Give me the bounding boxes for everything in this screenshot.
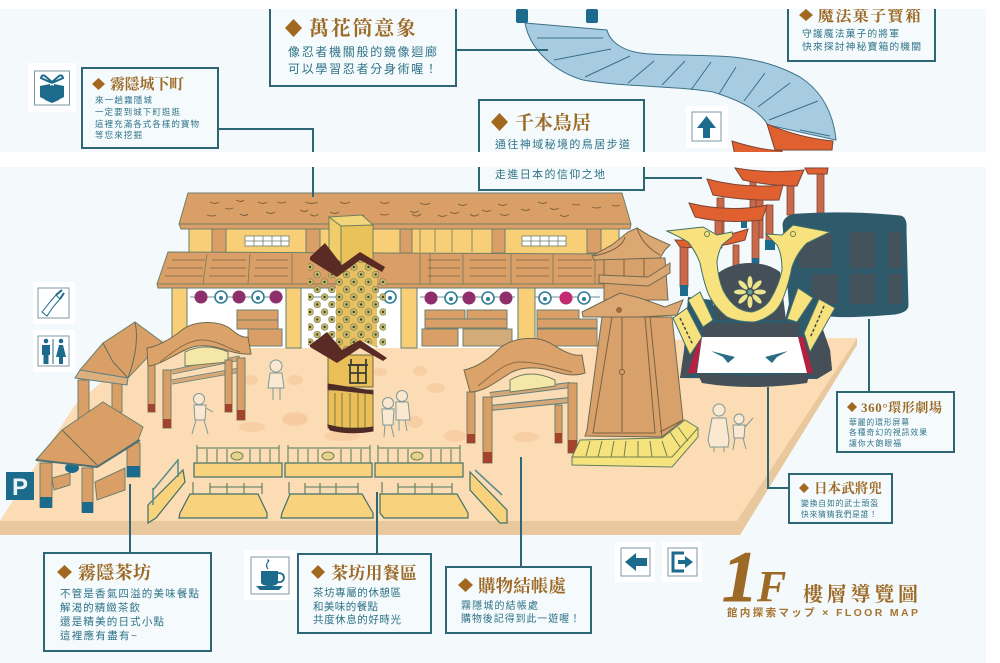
callout: 360 環形劇場: 360°環形劇場 <box>861 400 942 415</box>
red side strips <box>688 337 702 373</box>
pagoda second roof <box>582 293 683 317</box>
chin guard <box>697 373 810 387</box>
floor map title: F <box>756 562 786 611</box>
icon: coffee cup <box>244 550 296 600</box>
pagoda top roof <box>592 228 670 260</box>
pagoda tower <box>572 228 698 467</box>
callout: 茶坊用餐區: 茶坊專屬的休憩區 <box>313 586 401 599</box>
floor map title: 樓層導覽圖 <box>803 582 918 606</box>
pagoda body <box>585 317 683 437</box>
ground floor interior <box>187 290 517 348</box>
callout: 茶坊用餐區 <box>298 492 431 633</box>
top white band <box>0 0 1000 9</box>
shoulders <box>680 297 832 379</box>
callout: 千本鳥居: 走進日本的信仰之地 <box>495 167 605 181</box>
lower roof <box>157 252 606 288</box>
eyes <box>711 351 735 363</box>
callout: 萬花筒意象: 萬花筒意象 <box>309 16 416 40</box>
icon: parking <box>6 472 34 501</box>
horns <box>667 225 830 322</box>
back left pavilion <box>75 322 162 418</box>
callout: 購物結帳處: 霧隱城的結帳處 <box>461 599 538 612</box>
floor map title <box>722 537 918 619</box>
middle white band <box>0 152 1000 167</box>
callout: 茶坊用餐區: 茶坊用餐區 <box>331 563 417 583</box>
callout: 萬花筒意象: 像忍者機關般的鏡像迴廊 <box>288 44 437 59</box>
callout: 霧隱茶坊 <box>44 484 211 651</box>
callout: 霧隱茶坊: 這裡應有盡有~ <box>60 629 137 642</box>
callout: 日本武將兜: 日本武將兜 <box>814 480 882 496</box>
columns <box>172 288 187 348</box>
floor map title: 館内探索マップ × FLOOR MAP <box>727 606 918 619</box>
callout: 千本鳥居: 千本鳥居 <box>515 112 591 134</box>
callout: 360 環形劇場: 讓你大飽眼福 <box>849 438 901 448</box>
yellow flaps <box>673 308 702 355</box>
360 theater cylinder <box>783 213 908 317</box>
callout: 霧隱茶坊: 不管是香氣四溢的美味餐點 <box>60 587 200 600</box>
callout: 購物結帳處 <box>446 457 591 633</box>
callout: 日本武將兜 <box>768 387 892 523</box>
icon: parking: P <box>12 474 28 501</box>
icon: exit <box>662 542 702 582</box>
callout: 霧隱城下町: 這裡充滿各式各樣的寶物 <box>95 119 199 129</box>
upper roof <box>179 193 631 229</box>
callout: 萬花筒意象: 可以學習忍者分身術喔！ <box>288 61 437 76</box>
visitor: girl <box>268 360 284 400</box>
callout: 茶坊用餐區: 共度休息的好時光 <box>313 613 402 626</box>
callout: 360 環形劇場: 各種奇幻的視訊效果 <box>849 427 927 437</box>
callout: 霧隱城下町: 一定要到城下町逛逛 <box>95 107 180 117</box>
dome <box>712 263 786 320</box>
left wavy gate <box>147 322 251 428</box>
callout: 千本鳥居 <box>479 100 702 190</box>
callout: 霧隱城下町: 霧隱城下町 <box>110 75 184 93</box>
visitors: pair of children <box>382 390 410 437</box>
stacked crates <box>237 310 597 346</box>
callout: 360 環形劇場: 華麗的環形屏幕 <box>849 417 909 427</box>
front left pavilion <box>36 402 143 513</box>
icon: up arrow <box>686 106 728 148</box>
callout: 魔法菓子寶箱: 快來探討神秘寶箱的機關 <box>802 40 921 53</box>
crest flower <box>734 276 766 308</box>
floor map title: 1 <box>722 537 758 617</box>
callout: 萬花筒意象 <box>270 0 548 86</box>
pagoda yellow base <box>572 420 698 467</box>
samurai kabuto helmet <box>667 225 835 387</box>
callout: 霧隱城下町: 來一趟霧隱城 <box>95 95 152 105</box>
blue spiral ramp <box>516 9 836 140</box>
icon: water bottle <box>33 282 75 324</box>
callout: 茶坊用餐區: 和美味的餐點 <box>313 600 378 613</box>
callout: 魔法菓子寶箱: 魔法菓子寶箱 <box>818 6 921 25</box>
right wavy gate <box>464 338 585 463</box>
callout: 魔法菓子寶箱 <box>788 0 935 61</box>
callout: 日本武將兜: 變換自如的武士頭盔 <box>801 498 878 508</box>
callout: 日本武將兜: 快來猜猜我們是誰！ <box>801 509 877 519</box>
callout: 霧隱城下町: 等您來挖掘 <box>95 130 142 140</box>
ninja mirror tower <box>308 215 387 433</box>
upper wall <box>189 226 619 256</box>
callout: 購物結帳處: 購物結帳處 <box>478 576 566 596</box>
callout: 千本鳥居: 通往神域秘境的鳥居步道 <box>495 137 630 151</box>
fences <box>148 445 507 523</box>
callout: 360 環形劇場 <box>837 319 954 452</box>
white mask <box>697 337 807 373</box>
callout: 魔法菓子寶箱: 守護魔法菓子的將軍 <box>802 27 899 40</box>
icon: left arrow <box>615 542 655 582</box>
visitor: running boy <box>192 394 213 434</box>
callout: 霧隱茶坊: 解渴的精緻茶飲 <box>60 601 140 614</box>
pagoda upper storey <box>604 258 668 300</box>
callout: 霧隱茶坊: 還是精美的日式小點 <box>60 615 164 628</box>
visitors: mother and child <box>708 404 753 452</box>
icon: restrooms <box>33 330 75 372</box>
lanterns <box>190 290 600 304</box>
callout: 購物結帳處: 購物後記得到此一遊喔！ <box>461 612 580 625</box>
upper windows <box>245 236 566 246</box>
callout: 霧隱茶坊: 霧隱茶坊 <box>78 562 151 583</box>
floor platform <box>0 338 857 535</box>
torii gates path <box>675 124 833 296</box>
callout: 霧隱城下町 <box>82 68 313 197</box>
icon: gift <box>28 63 76 112</box>
main building <box>157 193 631 348</box>
